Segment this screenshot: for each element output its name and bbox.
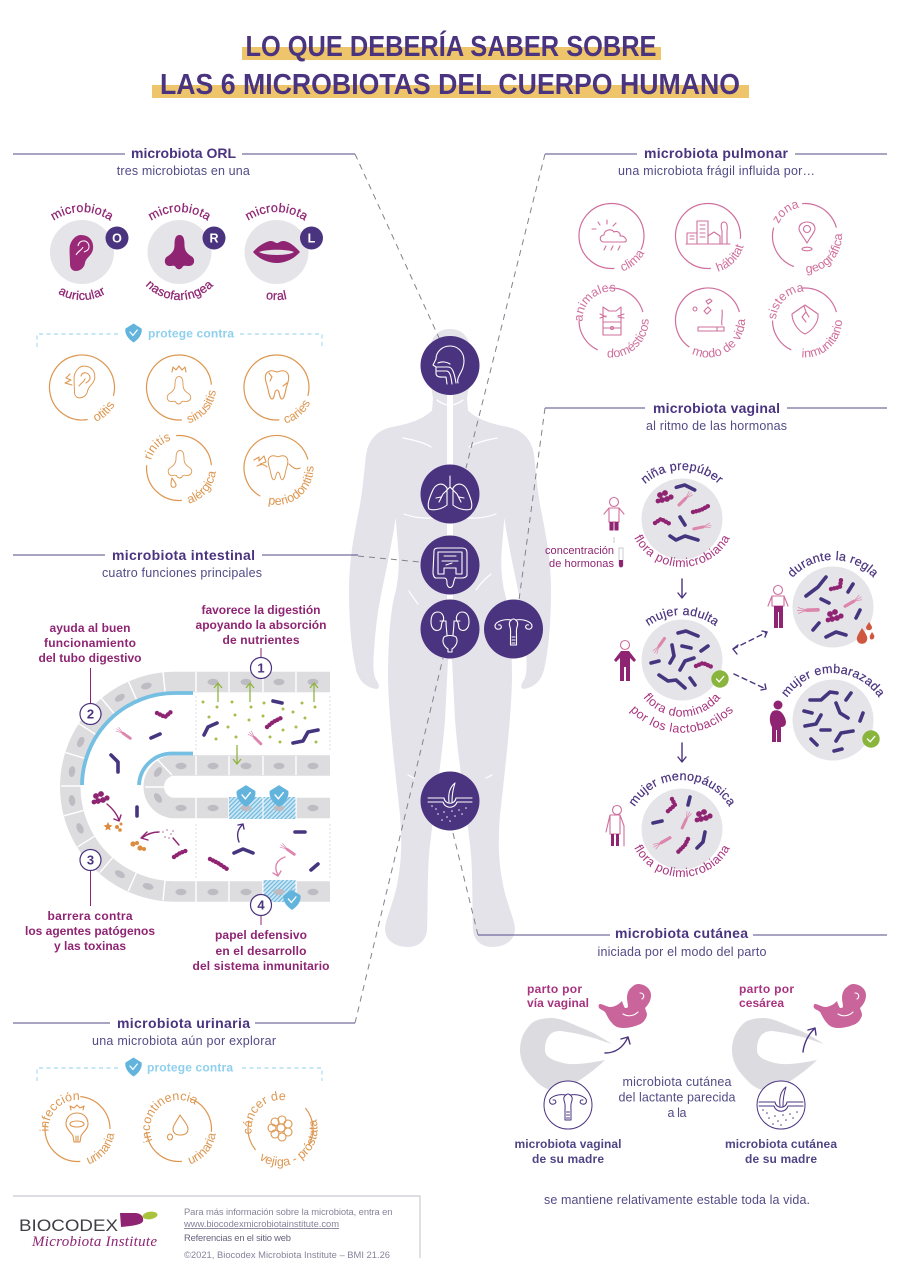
logo: Biocodex Microbiota Institute xyxy=(19,1211,158,1250)
text: function 1 xyxy=(196,603,326,647)
panel: microbiota intestinal xyxy=(13,547,358,973)
icon: ear microbiota: O xyxy=(112,232,122,246)
bacteria in the gut lumen xyxy=(92,701,318,870)
icon: incontinencia urinaria: urinaria xyxy=(188,1134,216,1164)
birth: parto por cesarea: cesárea xyxy=(739,996,784,1010)
icon: skin xyxy=(420,772,480,830)
protege contra bracket xyxy=(37,1058,322,1081)
icon: sistema inmunitario: inmunitario xyxy=(802,320,842,358)
icon: otitis: otitis xyxy=(94,402,114,421)
birth: parto por via vaginal: microbiota vaginal xyxy=(514,1137,622,1151)
icon: sistema inmunitario xyxy=(768,285,842,358)
icon: blood drops xyxy=(857,622,874,644)
icon: modo de vida xyxy=(674,287,746,358)
icon: girl figure xyxy=(604,498,624,530)
icon: older woman figure xyxy=(606,806,624,846)
circle: mujer adulta: flora dominada xyxy=(644,693,721,717)
footer credits: Referencias en el sitio web xyxy=(184,1232,291,1243)
toxins xyxy=(104,822,146,851)
numbered marker 4: 4 xyxy=(257,898,265,912)
icon: rinitis alergica: alérgica xyxy=(188,472,216,504)
text: function 4: del sistema inmunitario xyxy=(192,959,330,973)
icon: lips microbiota: microbiota xyxy=(245,202,307,221)
heading: microbiota ORL: microbiota ORL xyxy=(131,145,236,161)
icon: ear microbiota: microbiota xyxy=(50,202,112,221)
circle: mujer adulta: mujer adulta xyxy=(646,607,718,626)
birth: parto por via vaginal: vía vaginal xyxy=(527,996,589,1010)
text: microbiota cutanea del lactante: del lactante parecida xyxy=(618,1090,736,1104)
icon: pregnant woman figure xyxy=(770,700,786,742)
icon: head airway xyxy=(420,336,480,395)
icon: infeccion urinaria xyxy=(40,1092,114,1164)
panel: microbiota urinaria xyxy=(13,1015,355,1169)
text: function 1: de nutrientes xyxy=(222,633,300,647)
cell dividers xyxy=(61,672,296,902)
icon: periodontitis xyxy=(243,434,314,507)
icon: cancer de vejiga - prostata xyxy=(242,1091,318,1169)
birth: parto por via vaginal xyxy=(514,982,651,1166)
text: stability note: se mantiene relativamente estable toda la vida. xyxy=(544,1193,810,1207)
text: function 3: y las toxinas xyxy=(54,939,126,953)
circle: nina prepuber xyxy=(634,463,730,568)
circle: durante la regla xyxy=(789,550,877,648)
icon: rinitis alergica xyxy=(144,434,216,504)
icon: cancer de vejiga - prostata: cáncer de xyxy=(242,1091,286,1134)
hormone concentration scale xyxy=(545,537,623,570)
title highlight bars xyxy=(152,47,749,98)
circle: mujer embarazada: mujer embarazada xyxy=(782,664,883,698)
footer xyxy=(13,1196,420,1260)
protege contra bracket: protege contra xyxy=(147,1060,233,1074)
icon: kidneys and bladder xyxy=(420,600,480,658)
circle: mujer menopausica xyxy=(630,773,734,878)
icon: infeccion urinaria: infección xyxy=(40,1092,79,1131)
text: function 2 xyxy=(38,621,142,665)
human body silhouette xyxy=(350,330,550,946)
numbered marker 3 xyxy=(80,850,101,906)
birth: parto por via vaginal: de su madre xyxy=(532,1152,604,1166)
numbered marker 4 xyxy=(250,894,272,925)
body circles with organ icons xyxy=(420,336,543,830)
protege contra bracket: protege contra xyxy=(148,326,234,340)
heading: microbiota urinaria xyxy=(13,1015,355,1048)
numbered marker 1: 1 xyxy=(257,660,265,676)
icon: ear microbiota xyxy=(50,202,128,300)
numbered marker 1 xyxy=(250,648,272,678)
icon: incontinencia urinaria xyxy=(143,1092,216,1164)
heading: microbiota intestinal xyxy=(13,547,358,580)
numbered marker 2 xyxy=(80,668,101,724)
circle: nina prepuber: niña prepúber xyxy=(641,463,723,484)
icon: cancer de vejiga - prostata: vejiga - próstata xyxy=(261,1119,318,1169)
heading: microbiota cutanea: iniciada por el modo del parto xyxy=(598,945,767,959)
icon: rinitis alergica: rinitis xyxy=(144,434,170,460)
icon: lungs xyxy=(420,464,480,524)
birth: parto por cesarea: de su madre xyxy=(745,1152,817,1166)
circle: mujer adulta xyxy=(628,607,733,733)
icon: nose microbiota: nasofaríngea xyxy=(146,280,214,300)
icon: clima xyxy=(578,202,645,271)
title text: LAS 6 MICROBIOTAS DEL CUERPO HUMANO xyxy=(160,69,740,101)
panel: microbiota cutanea xyxy=(478,925,887,1207)
icon: zona geografica: zona xyxy=(773,202,800,224)
icon: animales domesticos: animales xyxy=(576,284,616,322)
icon: zona geografica xyxy=(772,202,842,276)
text: function 4: papel defensivo xyxy=(215,928,307,942)
text: function 4: en el desarrollo xyxy=(216,944,306,958)
title xyxy=(152,29,749,101)
footer credits: Para más información sobre la microbiota, entra en xyxy=(184,1206,392,1217)
icon: incontinencia urinaria: incontinencia xyxy=(143,1092,197,1143)
icon: intestine xyxy=(420,536,480,594)
text: microbiota cutanea del lactante: microbiota cutánea xyxy=(622,1075,732,1089)
hormone concentration scale: concentración xyxy=(545,545,614,557)
dotted boundaries xyxy=(196,696,330,878)
heading: microbiota ORL: tres microbiotas en una xyxy=(117,164,250,178)
heading: microbiota ORL xyxy=(13,145,355,178)
panel: microbiota ORL xyxy=(13,145,355,507)
heading: microbiota intestinal: cuatro funciones principales xyxy=(102,566,262,580)
text: function 3: barrera contra xyxy=(48,909,133,923)
icon: nose microbiota xyxy=(146,202,226,300)
heading: microbiota cutanea xyxy=(478,925,887,959)
heading: microbiota urinaria: una microbiota aún por explorar xyxy=(92,1034,276,1048)
cell nuclei xyxy=(68,679,319,895)
icon: infeccion urinaria: urinaria xyxy=(86,1134,114,1164)
birth: parto por via vaginal: parto por xyxy=(527,982,582,996)
green absorption arrows xyxy=(214,683,318,764)
footer credits: ©2021, Biocodex Microbiota Institute – BMI 21.26 xyxy=(184,1249,390,1260)
mucus blue layer xyxy=(82,693,193,785)
heading: microbiota intestinal: microbiota intestinal xyxy=(112,547,255,563)
icon: lips microbiota: L xyxy=(308,232,316,246)
icon: woman during period figure xyxy=(768,586,788,628)
text: function 2: del tubo digestivo xyxy=(38,651,142,665)
icon: uterus xyxy=(484,600,543,658)
numbered marker 2: 2 xyxy=(87,706,94,722)
immune shields xyxy=(237,785,301,910)
icon: caries xyxy=(243,354,310,423)
title text xyxy=(160,29,740,101)
circle: nina prepuber: flora polimicrobiana xyxy=(634,534,730,568)
hormone concentration scale: de hormonas xyxy=(549,558,614,570)
immune hatched cells xyxy=(229,797,296,902)
icon: clima: clima xyxy=(621,250,644,271)
circle: mujer menopausica: mujer menopáusica xyxy=(630,773,734,807)
icon: modo de vida: modo de vida xyxy=(692,319,746,358)
icon: zona geografica: geográfica xyxy=(806,234,842,276)
birth: parto por cesarea xyxy=(725,982,866,1166)
heading: microbiota urinaria: microbiota urinaria xyxy=(117,1015,250,1031)
circle: durante la regla: durante la regla xyxy=(789,550,877,578)
icon: lips microbiota xyxy=(244,202,323,300)
logo: Biocodex Microbiota Institute: Microbiota Institute xyxy=(31,1234,157,1250)
icon: sistema inmunitario: sistema xyxy=(768,285,804,319)
gut wall bands xyxy=(70,682,330,892)
icon: animales domesticos xyxy=(576,284,649,358)
circle: mujer adulta: por los lactobacilos xyxy=(628,706,733,733)
birth: parto por cesarea: parto por xyxy=(739,982,794,996)
text: microbiota cutanea del lactante xyxy=(618,1075,736,1120)
birth: parto por cesarea: microbiota cutánea xyxy=(725,1137,837,1151)
protege contra bracket xyxy=(37,324,322,347)
text: function 2: ayuda al buen xyxy=(50,621,130,635)
title text: LO QUE DEBERÍA SABER SOBRE xyxy=(246,29,656,63)
icon: caries: caries xyxy=(284,400,310,423)
text: function 3 xyxy=(25,909,155,953)
icon: ear microbiota: auricular xyxy=(58,288,104,300)
numbered marker 3: 3 xyxy=(87,852,94,868)
icon: nose microbiota: microbiota xyxy=(148,202,210,221)
text: function 2: funcionamiento xyxy=(44,636,136,650)
pathogen and toxin arrows xyxy=(107,804,285,876)
circle: mujer embarazada xyxy=(782,664,883,760)
icon: periodontitis: periodontitis xyxy=(268,466,314,507)
icon: nose microbiota: R xyxy=(209,232,219,246)
heading: microbiota pulmonar: microbiota pulmonar xyxy=(644,145,789,161)
heading: microbiota vaginal xyxy=(545,400,887,433)
heading: microbiota cutanea: microbiota cutánea xyxy=(615,925,748,941)
gut diagram xyxy=(61,672,330,910)
arrows between stages xyxy=(678,579,767,762)
icon: animales domesticos: domésticos xyxy=(608,319,649,358)
heading: microbiota pulmonar xyxy=(545,145,887,178)
heading: microbiota vaginal: microbiota vaginal xyxy=(653,400,780,416)
text: function 3: los agentes patógenos xyxy=(25,924,155,938)
text: function 1: favorece la digestión xyxy=(202,603,320,617)
icon: otitis xyxy=(48,354,116,421)
circle: mujer menopausica: flora polimicrobiana xyxy=(634,844,730,878)
icon: adult woman figure xyxy=(614,640,636,681)
heading: microbiota pulmonar: una microbiota frágil influida por… xyxy=(618,164,815,178)
icon: sinusitis xyxy=(146,354,216,423)
connector lines xyxy=(355,154,545,1023)
icon: habitat: hábitat xyxy=(716,244,744,272)
panel: microbiota vaginal xyxy=(545,400,887,878)
heading: microbiota vaginal: al ritmo de las hormonas xyxy=(646,419,787,433)
icon: lips microbiota: oral xyxy=(266,290,286,300)
icon: habitat xyxy=(674,202,744,272)
logo: Biocodex Microbiota Institute: BIOCODEX xyxy=(19,1216,118,1235)
text: function 1: apoyando la absorción xyxy=(196,618,326,632)
footer credits: www.biocodexmicrobiotainstitute.com xyxy=(183,1218,339,1229)
icon: sinusitis: sinusitis xyxy=(187,390,216,423)
footer credits xyxy=(183,1206,392,1260)
panel: microbiota pulmonar xyxy=(545,145,887,358)
text: function 4 xyxy=(192,928,330,973)
nutrient dots xyxy=(202,700,318,744)
text: microbiota cutanea del lactante: a la xyxy=(668,1106,687,1120)
